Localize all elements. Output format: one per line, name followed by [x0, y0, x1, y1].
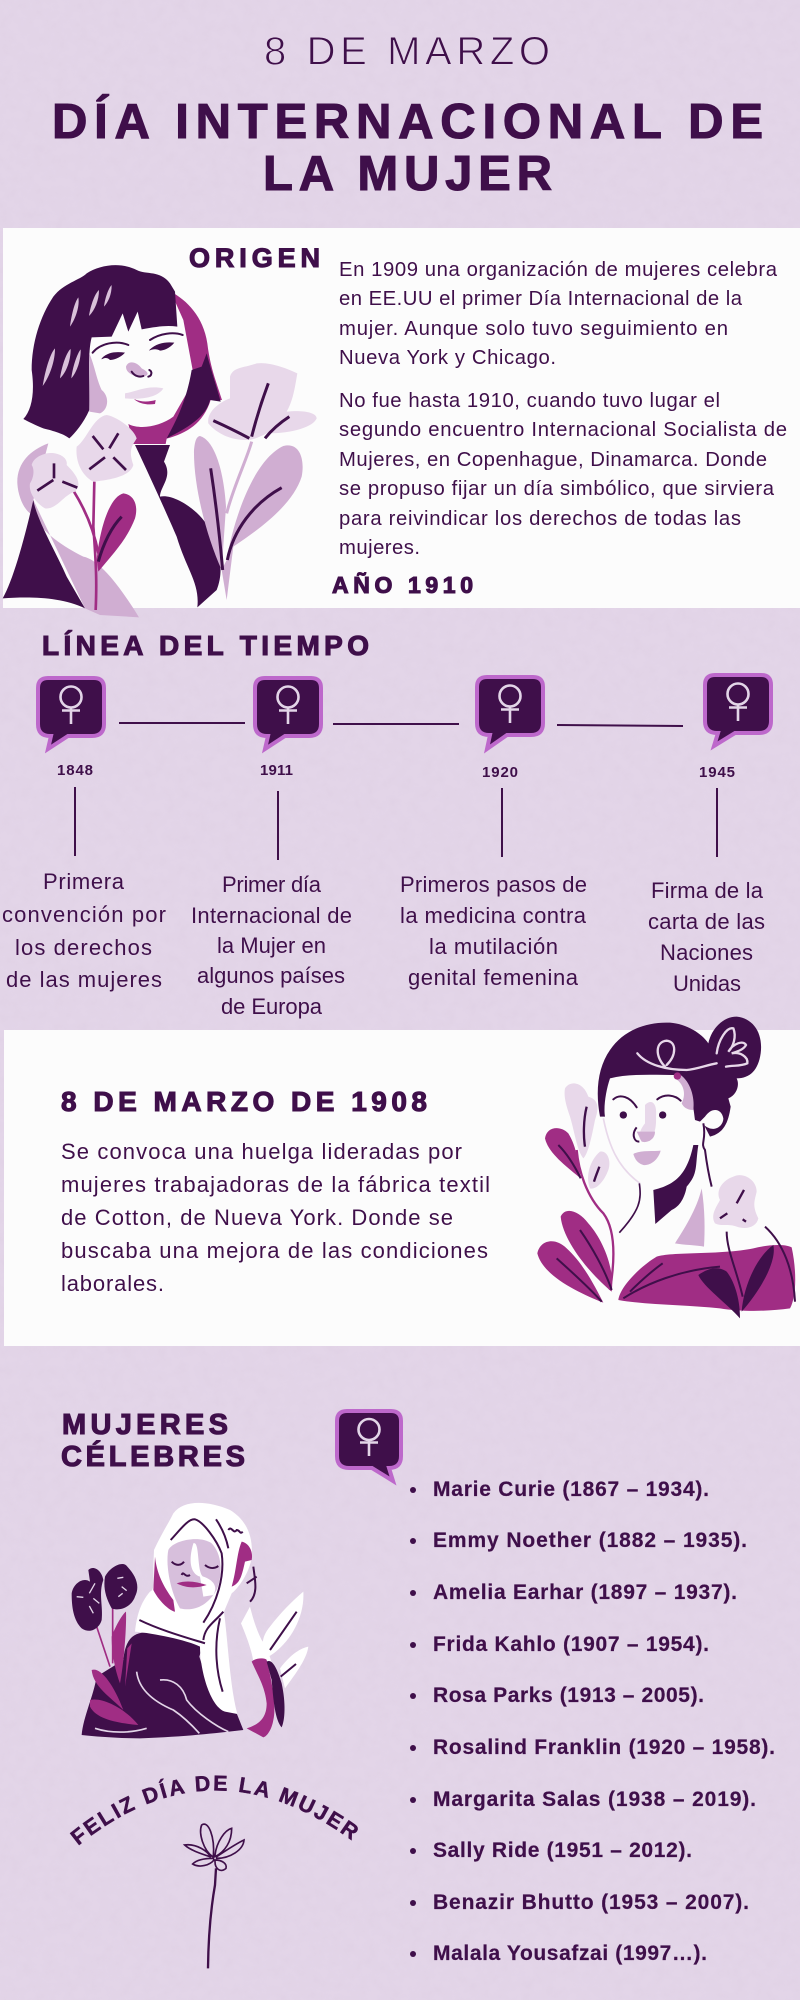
list: mujeres célebres: [410, 1478, 775, 1965]
text block: huelga: [61, 1139, 490, 1296]
names: Amelia Earhar (1897 – 1937).: [433, 1581, 737, 1604]
names: Marie Curie (1867 – 1934).: [433, 1478, 709, 1501]
text block: origen paragraph 2: segundo encuentro Internacional Socialista de: [339, 419, 787, 441]
text block: huelga: de Cotton, de Nueva York. Donde se: [61, 1205, 453, 1230]
text block: huelga: Se convoca una huelga lideradas por: [61, 1139, 462, 1164]
names: Sally Ride (1951 – 2012).: [433, 1839, 692, 1862]
event text 1911: la Mujer en: [217, 933, 326, 958]
event text 1911: [191, 872, 352, 1019]
names: [433, 1478, 775, 1965]
event text 1911: Primer día: [222, 872, 322, 897]
text block: origen paragraph 1: En 1909 una organización de mujeres celebra: [339, 259, 778, 281]
text block: origen paragraph 2: para reivindicar los derechos de todas las: [339, 508, 741, 530]
panel: mujeres célebres: [61, 1409, 775, 1968]
icon: speech bubble female symbol 1848: [38, 678, 104, 749]
event text 1911: de Europa: [221, 994, 323, 1019]
event text 1911: algunos países: [197, 963, 345, 988]
names: Benazir Bhutto (1953 – 2007).: [433, 1891, 749, 1914]
event text 1848: convención por: [2, 902, 166, 927]
text block: origen paragraph 1: Nueva York y Chicago.: [339, 347, 556, 369]
text block: origen paragraph 2: [339, 390, 787, 559]
title: [52, 30, 763, 201]
names: Frida Kahlo (1907 – 1954).: [433, 1633, 709, 1656]
year 1920: 1920: [482, 764, 518, 781]
event text 1945: [648, 878, 765, 996]
names: Emmy Noether (1882 – 1935).: [433, 1529, 747, 1552]
text block: origen paragraph 2: se propuso fijar un día simbólico, que sirviera: [339, 478, 775, 500]
heading: origen: ORIGEN: [189, 243, 320, 273]
curved greeting: FELIZ DÍA DE LA MUJER: [70, 1775, 358, 1846]
year 1848: 1848: [57, 762, 93, 779]
stem 1920: [501, 788, 503, 857]
event text 1848: de las mujeres: [6, 967, 162, 992]
icon: speech bubble female symbol: [337, 1411, 401, 1481]
event text 1848: Primera: [43, 869, 125, 894]
text block: huelga: buscaba una mejora de las condiciones: [61, 1238, 488, 1263]
text block: origen paragraph 2: mujeres.: [339, 537, 420, 559]
stem 1848: [74, 787, 76, 856]
names: Rosalind Franklin (1920 – 1958).: [433, 1736, 775, 1759]
illustration: woman with flowers: [3, 265, 317, 617]
icon: speech bubble female symbol 1911: [255, 678, 321, 749]
illustration: woman with hair bun: [537, 1017, 795, 1318]
stem 1945: [716, 788, 718, 857]
bullets: [410, 1487, 416, 1957]
icon: speech bubble female symbol 1920: [477, 677, 543, 749]
event text 1920: [400, 872, 587, 990]
text block: huelga: mujeres trabajadoras de la fábrica textil: [61, 1172, 490, 1197]
text block: origen paragraph 2: Mujeres, en Copenhague, Dinamarca. Donde: [339, 449, 767, 471]
text block: origen paragraph 1: en EE.UU el primer Día Internacional de la: [339, 288, 743, 310]
text block: origen paragraph 2: No fue hasta 1910, cuando tuvo lugar el: [339, 390, 720, 412]
panel: origen: [3, 228, 800, 617]
heading: mujeres célebres: CÉLEBRES: [61, 1439, 245, 1473]
event text 1945: carta de las: [648, 909, 765, 934]
main title line 1: DÍA INTERNACIONAL DE: [52, 95, 763, 149]
label: año 1910: AÑO 1910: [332, 571, 473, 598]
names: Rosa Parks (1913 – 2005).: [433, 1684, 704, 1707]
main title line 2: LA MUJER: [263, 147, 552, 201]
event text 1945: Naciones: [660, 940, 753, 965]
event text 1920: Primeros pasos de: [400, 872, 587, 897]
text block: origen paragraph 1: [339, 259, 778, 369]
names: Malala Yousafzai (1997…).: [433, 1942, 707, 1965]
heading: 8 de marzo de 1908: 8 DE MARZO DE 1908: [61, 1086, 427, 1117]
year 1911: 1911: [260, 762, 293, 779]
year 1945: 1945: [699, 764, 735, 781]
event text 1848: los derechos: [15, 935, 152, 960]
event text 1911: Internacional de: [191, 903, 352, 928]
heading: línea del tiempo: LÍNEA DEL TIEMPO: [42, 630, 369, 661]
event text 1920: la mutilación: [429, 934, 558, 959]
panel: línea del tiempo: [2, 630, 771, 1019]
names: Margarita Salas (1938 – 2019).: [433, 1788, 756, 1811]
text block: origen paragraph 1: mujer. Aunque solo tuvo seguimiento en: [339, 318, 728, 340]
text block: huelga: laborales.: [61, 1271, 164, 1296]
illustration: woman in headscarf: [72, 1503, 308, 1738]
event text 1945: Firma de la: [651, 878, 764, 903]
icon: speech bubble female symbol 1945: [705, 675, 771, 746]
event text 1920: la medicina contra: [400, 903, 587, 928]
heading: mujeres célebres: [61, 1409, 245, 1473]
event text 1848: [2, 869, 166, 992]
event text 1945: Unidas: [673, 971, 741, 996]
icon: line-drawn flower: [185, 1824, 244, 1968]
heading: mujeres célebres: MUJERES: [62, 1409, 228, 1441]
event text 1920: genital femenina: [408, 965, 579, 990]
panel: 8 de marzo de 1908: [4, 1017, 800, 1346]
subtitle: 8 de marzo: 8 DE MARZO: [264, 30, 550, 74]
timeline connectors: [119, 723, 683, 726]
stem 1911: [277, 791, 279, 860]
